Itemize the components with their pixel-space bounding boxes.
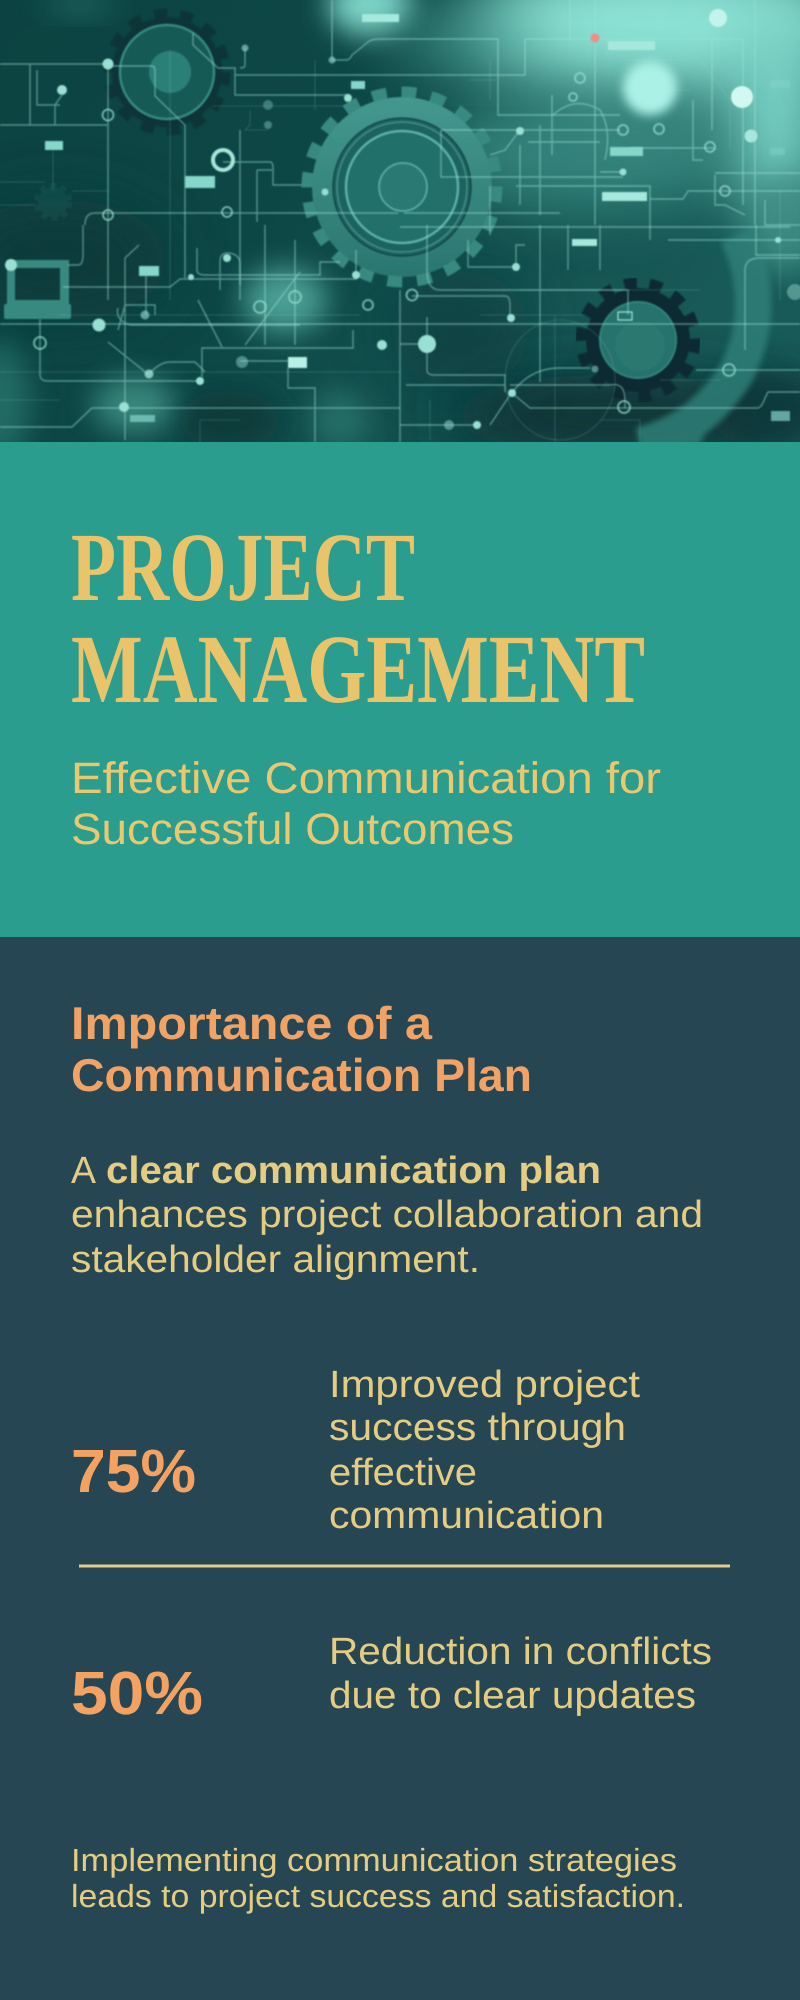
subtitle bbox=[71, 754, 661, 854]
icon: dim small gear bbox=[36, 185, 70, 219]
subtitle: Successful Outcomes bbox=[71, 805, 514, 854]
intro text bbox=[71, 1150, 703, 1281]
statistic: 75%: Improved project bbox=[329, 1364, 640, 1406]
statistic: 50% bbox=[71, 1631, 712, 1727]
statistic: 50%: Reduction in conflicts bbox=[329, 1631, 712, 1673]
statistic: 75%: success through bbox=[329, 1407, 626, 1449]
title: MANAGEMENT bbox=[71, 616, 645, 724]
intro text: clear communication plan bbox=[106, 1150, 601, 1192]
background glow bbox=[0, 0, 800, 460]
panel: communication plan bbox=[0, 937, 800, 2000]
circuit lines bbox=[0, 0, 800, 445]
closing note bbox=[71, 1842, 685, 1914]
heading: Communication Plan bbox=[71, 1049, 532, 1101]
statistic: 75%: effective bbox=[329, 1452, 477, 1494]
heading: Importance of a bbox=[71, 997, 432, 1049]
icon: dark gear bottom right bbox=[582, 284, 694, 396]
icon: central large gear bbox=[307, 92, 497, 282]
icon: laptop bbox=[4, 260, 71, 319]
intro text: A bbox=[71, 1150, 97, 1192]
panel: title band bbox=[0, 442, 800, 937]
statistic: 75%: 75% bbox=[71, 1437, 196, 1505]
heading bbox=[71, 997, 532, 1101]
subtitle: Effective Communication for bbox=[71, 754, 661, 803]
intro text: stakeholder alignment. bbox=[71, 1239, 480, 1281]
icon: dark gear top left bbox=[109, 14, 225, 130]
statistic: 75% bbox=[71, 1364, 640, 1537]
statistic: 50%: due to clear updates bbox=[329, 1675, 696, 1717]
hero image: circuit board and gears bbox=[0, 0, 800, 460]
circuit chips bbox=[45, 14, 790, 422]
circuit nodes bbox=[5, 9, 800, 430]
statistic: 75%: communication bbox=[329, 1495, 604, 1537]
icon: faded large gear bbox=[640, 235, 753, 445]
closing note: Implementing communication strategies bbox=[71, 1842, 677, 1878]
statistic: 50%: 50% bbox=[71, 1659, 203, 1727]
title: PROJECT bbox=[71, 514, 415, 622]
glowing burst bbox=[623, 61, 677, 115]
closing note: leads to project success and satisfaction. bbox=[71, 1878, 685, 1914]
title bbox=[71, 514, 645, 724]
intro text: enhances project collaboration and bbox=[71, 1194, 703, 1236]
